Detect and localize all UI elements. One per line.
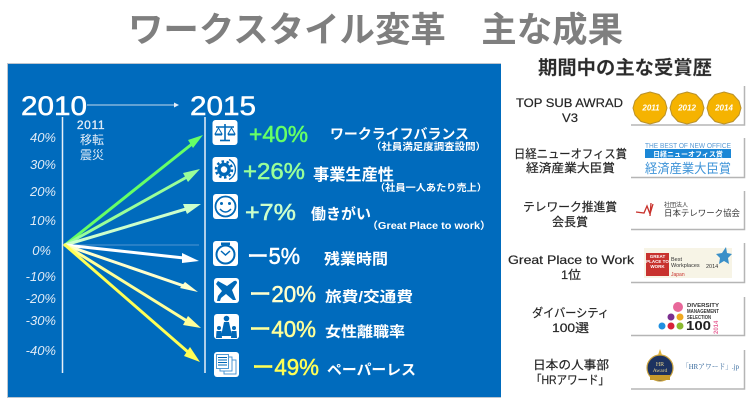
icon: airplane	[214, 278, 239, 303]
result labels: 事業生産性	[313, 165, 394, 184]
result labels: （社員一人あたり売上）	[375, 182, 487, 194]
logo: great place to work: WORK	[650, 264, 665, 269]
medals: TOP SUB AWARD: 2014	[714, 104, 733, 112]
event note 2011: 2011	[77, 118, 105, 132]
award names	[508, 96, 635, 387]
logo: new office award: THE BEST OF NEW OFFICE	[645, 141, 731, 150]
result values: ー5%	[247, 243, 300, 269]
logo: new office award	[645, 141, 731, 176]
axis scale labels: -20%	[26, 291, 56, 306]
axis scale labels: 30%	[30, 157, 56, 172]
award names: 会長賞	[552, 215, 588, 229]
axis scale labels: 10%	[30, 213, 56, 228]
result values: ー49%	[252, 354, 319, 380]
result labels: 残業時間	[324, 250, 388, 268]
logo: HR award: HR	[656, 362, 664, 368]
logo: great place to work	[644, 247, 732, 278]
award names: V3	[562, 111, 578, 125]
logo: HR award	[647, 349, 739, 381]
result values: ー20%	[249, 281, 316, 307]
medals: TOP SUB AWARD	[633, 92, 741, 124]
result labels: 女性離職率	[325, 323, 405, 341]
axis scale labels	[26, 130, 56, 358]
axis scale labels: 0%	[32, 243, 51, 258]
arrows	[65, 135, 203, 362]
logo: diversity 100: MANAGEMENT	[687, 309, 719, 315]
logo: telework association: 社団法人	[664, 201, 688, 209]
logo: HR award: 「HRアワード」.jp	[682, 362, 739, 371]
award names: 「HRアワード」	[531, 373, 609, 387]
result values	[243, 121, 319, 380]
result labels: 働きがい	[311, 205, 371, 223]
event note 2011	[77, 118, 105, 162]
logo: new office award: 経済産業大臣賞	[645, 161, 731, 176]
icon: gear	[212, 157, 238, 182]
result values: +7%	[245, 199, 296, 225]
logo: telework association: 日本テレワーク協会	[664, 208, 740, 218]
logo: great place to work: Japan	[671, 272, 685, 278]
award names: 経済産業大臣賞	[526, 161, 615, 175]
award names: TOP SUB AWRAD	[516, 96, 623, 110]
logo: diversity 100: SELECTION	[687, 315, 711, 321]
timeline: years	[21, 91, 256, 121]
logo: new office award: 日経ニューオフィス賞	[653, 150, 723, 158]
medals: TOP SUB AWARD: 2012	[677, 104, 696, 112]
logo: great place to work: Workplaces	[671, 263, 700, 269]
icon: stopwatch	[213, 241, 238, 266]
panel: results	[7, 63, 501, 398]
award names: 日経ニューオフィス賞	[514, 147, 627, 161]
event note 2011: 震災	[80, 148, 104, 162]
medals: TOP SUB AWARD: 2011	[641, 104, 660, 112]
timeline: years: 2010	[21, 91, 87, 121]
timeline: years: 2015	[190, 91, 256, 121]
logo: diversity 100: 100	[686, 318, 711, 333]
result labels: 旅費/交通費	[325, 288, 413, 306]
icon: family	[214, 314, 239, 339]
result values: +26%	[243, 158, 305, 184]
axis scale labels: -30%	[26, 313, 56, 328]
logo: diversity 100: DIVERSITY	[687, 303, 720, 309]
award names: ダイバーシティ	[532, 305, 609, 320]
award names: 1位	[561, 268, 581, 282]
logo: great place to work: 2014	[706, 264, 718, 270]
logo: HR award: Award	[653, 368, 667, 374]
logo: great place to work: Best	[671, 257, 682, 263]
result labels	[311, 126, 491, 379]
icon: scales	[212, 120, 238, 145]
icon: smile	[213, 194, 238, 219]
event note 2011: 移転	[80, 133, 104, 147]
logo: diversity 100: 2014	[714, 320, 720, 334]
award names: テレワーク推進賞	[523, 199, 617, 214]
title: ワークスタイル変革 主な成果	[128, 11, 623, 50]
result values: +40%	[249, 121, 308, 147]
logo: telework association	[636, 201, 740, 218]
axis lines	[62, 117, 205, 373]
award names: Great Place to Work	[508, 253, 635, 267]
award cards	[631, 86, 744, 389]
awards heading: 期間中の主な受賞歴	[538, 56, 712, 79]
axis scale labels: -10%	[26, 269, 56, 284]
result labels: ペーパーレス	[327, 362, 416, 379]
logo: great place to work: PLACE TO	[646, 259, 669, 264]
logo: great place to work: GREAT	[650, 254, 665, 259]
axis scale labels: -40%	[26, 343, 56, 358]
result labels: （社員満足度調査設問）	[371, 141, 486, 153]
result values: ー40%	[249, 316, 316, 342]
icon: documents	[214, 352, 239, 377]
award names: 日本の人事部	[533, 358, 609, 372]
award names: 100選	[552, 321, 589, 335]
logo: diversity 100	[658, 302, 720, 334]
result labels: ワークライフバランス	[330, 126, 469, 142]
result labels: （Great Place to work）	[367, 220, 491, 232]
axis scale labels: 20%	[29, 184, 56, 199]
axis scale labels: 40%	[30, 130, 56, 145]
